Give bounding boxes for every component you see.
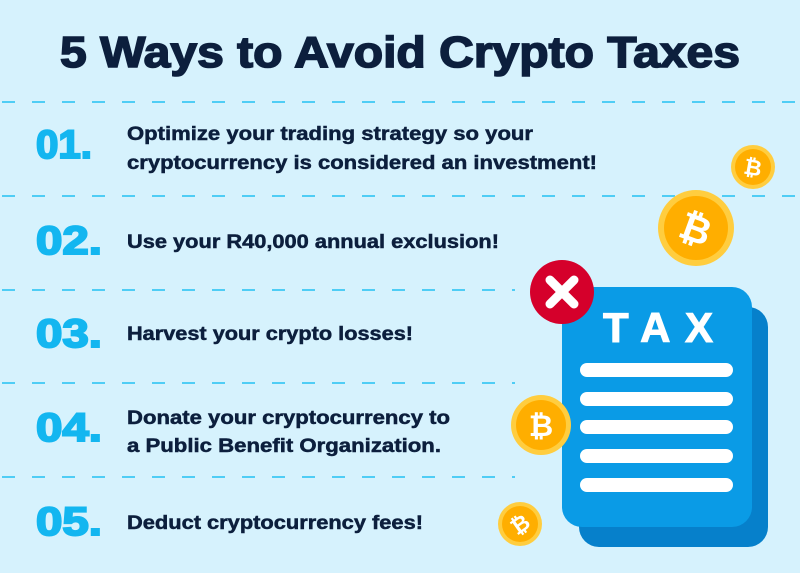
- step numbers: 01.: [36, 123, 92, 167]
- step numbers: 05.: [36, 500, 102, 544]
- step texts: Use your R40,000 annual exclusion!: [127, 232, 499, 253]
- step texts: Deduct cryptocurrency fees!: [127, 513, 423, 534]
- step numbers: 02.: [36, 219, 102, 263]
- icon: coins: [498, 145, 775, 546]
- step texts: Harvest your crypto losses!: [127, 324, 413, 345]
- icon: red x: [530, 260, 594, 324]
- icon: tax document: [562, 287, 768, 547]
- icon: coins: ₿: [506, 509, 535, 540]
- step texts: a Public Benefit Organization.: [127, 436, 441, 457]
- step texts: [127, 124, 597, 534]
- icon: coins: ₿: [674, 205, 717, 255]
- icon: coins: ₿: [742, 154, 764, 181]
- title: 5 Ways to Avoid Crypto Taxes: [60, 28, 740, 77]
- step texts: Optimize your trading strategy so your: [127, 124, 534, 145]
- step numbers: 04.: [36, 406, 102, 450]
- step numbers: 03.: [36, 312, 102, 356]
- step texts: cryptocurrency is considered an investment!: [127, 153, 597, 174]
- icon: tax document: TAX: [603, 304, 713, 351]
- step numbers: [36, 123, 102, 544]
- step texts: Donate your cryptocurrency to: [127, 408, 450, 429]
- icon: coins: ₿: [529, 410, 553, 443]
